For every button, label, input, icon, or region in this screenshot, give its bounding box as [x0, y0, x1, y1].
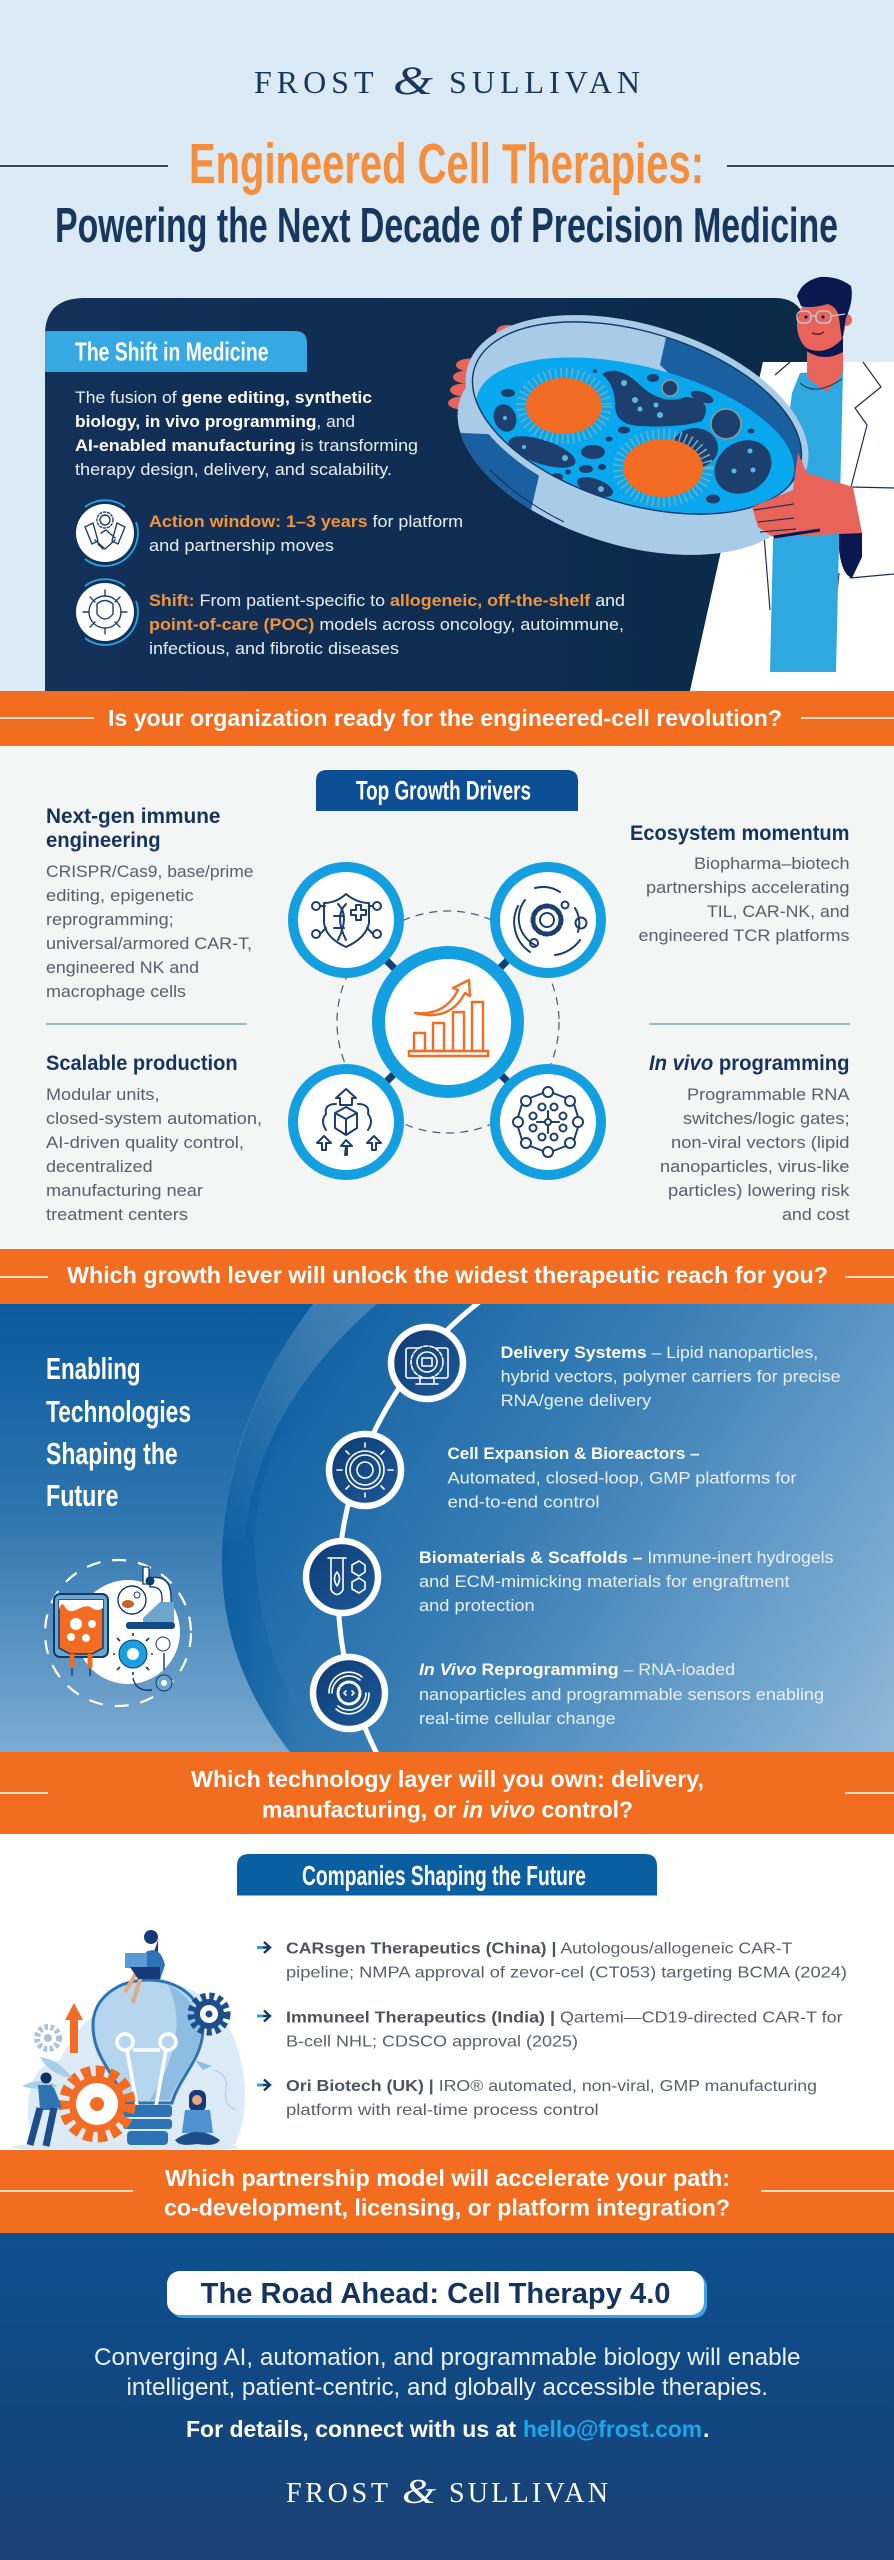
shift text: Shift: From patient-specific to allogeneic, off-the-shelf and — [149, 591, 625, 610]
woman on bulb — [125, 1930, 165, 2003]
action window text — [149, 512, 463, 555]
right hand — [752, 453, 862, 537]
timeline arc — [336, 1304, 481, 1752]
driver: ecosystem momentum: TIL, CAR-NK, and — [707, 902, 850, 921]
driver: next-gen immune engineering — [46, 805, 254, 1001]
callout band 4 — [0, 2150, 894, 2233]
panel: top growth drivers — [0, 746, 894, 1249]
driver: scalable production — [46, 1052, 262, 1224]
heading pill: The Road Ahead: Cell Therapy 4.0 — [201, 2278, 670, 2310]
text: in vivo reprogramming — [419, 1660, 824, 1728]
petri dish — [458, 315, 808, 555]
text: biomaterials — [419, 1548, 834, 1615]
icon: nanoparticle network — [495, 1069, 601, 1175]
text: in vivo reprogramming: nanoparticles and programmable sensors enabling — [419, 1685, 824, 1704]
cell blobs — [490, 369, 782, 505]
shift intro text: biology, in vivo programming , and — [75, 412, 355, 431]
tab: the shift heading — [45, 331, 307, 372]
shift intro text: The fusion of gene editing, synthetic — [75, 388, 372, 407]
callout band 3: manufacturing, or in vivo control? — [262, 1796, 633, 1822]
icon: growth chart — [378, 952, 518, 1092]
contact line: For details, connect with us at — [186, 2416, 516, 2442]
icon: handshake — [76, 500, 138, 566]
heading: companies — [237, 1854, 657, 1896]
driver: scalable production: treatment centers — [46, 1205, 188, 1224]
logo: footer: & — [402, 2472, 437, 2511]
head — [797, 277, 852, 392]
text: biomaterials: and ECM-mimicking materials for engraftment — [419, 1572, 790, 1591]
text: delivery systems: hybrid vectors, polymer carriers for precise — [501, 1367, 841, 1386]
leaves — [22, 2057, 72, 2089]
action window text: and partnership moves — [149, 536, 334, 555]
callout band 4: Which partnership model will accelerate your path: — [165, 2165, 730, 2191]
company: Immuneel: Immuneel Therapeutics (India) | Qartemi—CD19-directed CAR-T for — [286, 2010, 843, 2026]
driver: ecosystem momentum: engineered TCR platforms — [638, 926, 850, 945]
tab: the shift heading: The Shift in Medicine — [75, 336, 268, 366]
text: delivery systems — [501, 1343, 841, 1410]
hub diagram — [293, 867, 601, 1175]
logo: footer: FROST — [286, 2478, 388, 2509]
callout band 2: Which growth lever will unlock the widest therapeutic reach for you? — [67, 1262, 828, 1288]
text: cell expansion: end-to-end control — [448, 1492, 600, 1512]
shift intro text: therapy design, delivery, and scalability. — [75, 460, 392, 479]
left fingers — [448, 325, 518, 410]
contact line: hello@frost.com — [523, 2416, 702, 2442]
orange cells — [521, 373, 708, 502]
driver: ecosystem momentum: Ecosystem momentum — [630, 822, 850, 845]
heading: enabling technologies — [46, 1351, 191, 1513]
driver: next-gen immune engineering: editing, epigenetic — [46, 886, 194, 905]
node: biomaterials — [306, 1541, 378, 1613]
paper plane — [195, 2060, 212, 2070]
text: in vivo reprogramming: real-time cellular change — [419, 1709, 616, 1728]
driver: ecosystem momentum: Biopharma–biotech — [694, 854, 850, 873]
driver: next-gen immune engineering: Next-gen immune — [46, 805, 220, 828]
driver: in vivo programming: particles) lowering risk — [668, 1181, 850, 1200]
heading: top growth drivers: Top Growth Drivers — [356, 776, 531, 806]
contact line: . — [703, 2416, 709, 2442]
driver: scalable production: Modular units, — [46, 1085, 160, 1104]
panel: the road ahead — [0, 2233, 894, 2560]
shift intro text — [75, 388, 418, 479]
driver: next-gen immune engineering: CRISPR/Cas9, base/prime — [46, 862, 254, 881]
closing text: intelligent, patient-centric, and globally accessible therapies. — [126, 2374, 768, 2401]
panel: enabling technologies — [0, 1304, 894, 1752]
node: delivery systems — [391, 1327, 463, 1399]
driver: ecosystem momentum — [630, 822, 850, 945]
driver: in vivo programming: switches/logic gates; — [683, 1109, 850, 1128]
driver: next-gen immune engineering: engineered NK and — [46, 958, 199, 977]
driver: scalable production: Scalable production — [46, 1052, 238, 1075]
text: cell expansion — [448, 1444, 797, 1512]
logo: Frost & Sullivan: & — [393, 58, 433, 103]
heading: top growth drivers — [316, 770, 578, 811]
shift text — [149, 591, 625, 658]
contact line — [186, 2416, 709, 2442]
microscope — [143, 1567, 149, 1584]
logo: Frost & Sullivan: FROST — [254, 64, 374, 100]
driver: next-gen immune engineering: universal/armored CAR-T, — [46, 934, 252, 953]
cells — [119, 1640, 147, 1668]
driver: scalable production: AI-driven quality control, — [46, 1133, 244, 1152]
man — [30, 2072, 60, 2146]
node: in vivo reprogramming — [313, 1657, 385, 1729]
callout band 2 — [0, 1249, 894, 1304]
callout band 1: Is your organization ready for the engineered-cell revolution? — [108, 705, 782, 731]
woman seated — [175, 2090, 220, 2145]
driver: in vivo programming: non-viral vectors (lipid — [671, 1133, 850, 1152]
company: Ori Biotech: platform with real-time process control — [286, 2102, 599, 2119]
driver: in vivo programming: Programmable RNA — [687, 1085, 850, 1104]
driver: next-gen immune engineering: macrophage cells — [46, 982, 186, 1001]
heading: enabling technologies: Shaping the — [46, 1436, 178, 1471]
bulb — [93, 1980, 203, 2103]
closing text: Converging AI, automation, and programmable biology will enable — [94, 2344, 801, 2371]
text: cell expansion: Automated, closed-loop, GMP platforms for — [448, 1468, 797, 1488]
text: cell expansion: Cell Expansion & Bioreactors – — [448, 1444, 700, 1463]
text: delivery systems: RNA/gene delivery — [501, 1391, 652, 1410]
driver: next-gen immune engineering: engineering — [46, 829, 161, 852]
driver: ecosystem momentum: partnerships accelerating — [646, 878, 850, 897]
driver: in vivo programming: and cost — [782, 1205, 850, 1224]
illustration: scientist holding petri dish — [433, 277, 894, 691]
company: Ori Biotech — [257, 2078, 817, 2119]
icon: gear orbit — [495, 867, 601, 973]
arrow — [65, 2003, 83, 2053]
driver: next-gen immune engineering: reprogramming; — [46, 910, 174, 929]
panel: companies — [0, 1834, 894, 2152]
text: in vivo reprogramming: In Vivo Reprogramming – RNA-loaded — [419, 1660, 735, 1679]
company: CARsgen: CARsgen Therapeutics (China) | Autologous/allogeneic CAR-T — [286, 1940, 793, 1958]
logo: Frost & Sullivan: SULLIVAN — [449, 64, 640, 100]
shift intro text: AI-enabled manufacturing is transforming — [75, 436, 418, 455]
logo: footer: SULLIVAN — [449, 2478, 608, 2509]
text: biomaterials: and protection — [419, 1596, 535, 1615]
driver: scalable production: closed-system automation, — [46, 1109, 262, 1128]
panel: the shift in medicine — [45, 298, 807, 691]
callout band 3: Which technology layer will you own: delivery, — [191, 1766, 704, 1792]
node: cell expansion — [329, 1434, 401, 1506]
closing text — [94, 2344, 801, 2401]
callout band 1 — [0, 691, 894, 746]
illustration: bioreactor and microscope — [45, 1560, 191, 1706]
illustration: light bulb team — [12, 1930, 245, 2152]
driver: in vivo programming — [649, 1052, 850, 1224]
driver: scalable production: decentralized — [46, 1157, 153, 1176]
shift text: infectious, and fibrotic diseases — [149, 639, 399, 658]
company: Immuneel: B-cell NHL; CDSCO approval (2025) — [286, 2034, 578, 2050]
heading: enabling technologies: Enabling — [46, 1351, 141, 1386]
company: Immuneel — [257, 2010, 843, 2050]
icon: cube with arrows — [293, 1069, 399, 1175]
action window text: Action window: 1–3 years for platform — [149, 512, 463, 531]
callout band 3 — [0, 1752, 894, 1834]
company: CARsgen: pipeline; NMPA approval of zevor-cel (CT053) targeting BCMA (2024) — [286, 1964, 847, 1982]
heading: enabling technologies: Technologies — [46, 1394, 191, 1429]
sleeve — [839, 533, 862, 578]
text: delivery systems: Delivery Systems – Lipid nanoparticles, — [501, 1343, 818, 1362]
heading: enabling technologies: Future — [46, 1478, 118, 1513]
logo: footer — [286, 2472, 608, 2511]
logo: Frost & Sullivan — [254, 58, 640, 103]
icon: shield and dna — [293, 867, 399, 973]
title — [0, 132, 894, 253]
company: CARsgen — [257, 1940, 847, 1982]
callout band 4: co-development, licensing, or platform integration? — [164, 2194, 730, 2220]
driver: in vivo programming: nanoparticles, virus-like — [660, 1157, 850, 1176]
heading pill — [167, 2271, 707, 2318]
heading: companies: Companies Shaping the Future — [302, 1860, 586, 1891]
driver: in vivo programming: In vivo programming — [649, 1052, 850, 1075]
driver: scalable production: manufacturing near — [46, 1181, 203, 1200]
shift text: point-of-care (POC) models across oncology, autoimmune, — [149, 615, 624, 634]
text: biomaterials: Biomaterials & Scaffolds – Immune-inert hydrogels — [419, 1548, 834, 1567]
lab coat — [690, 362, 894, 691]
shirt and tie — [770, 370, 843, 672]
icon: cell face — [76, 579, 138, 645]
gears — [64, 2071, 130, 2137]
company: Ori Biotech: Ori Biotech (UK) | IRO® automated, non-viral, GMP manufacturing — [286, 2078, 817, 2095]
